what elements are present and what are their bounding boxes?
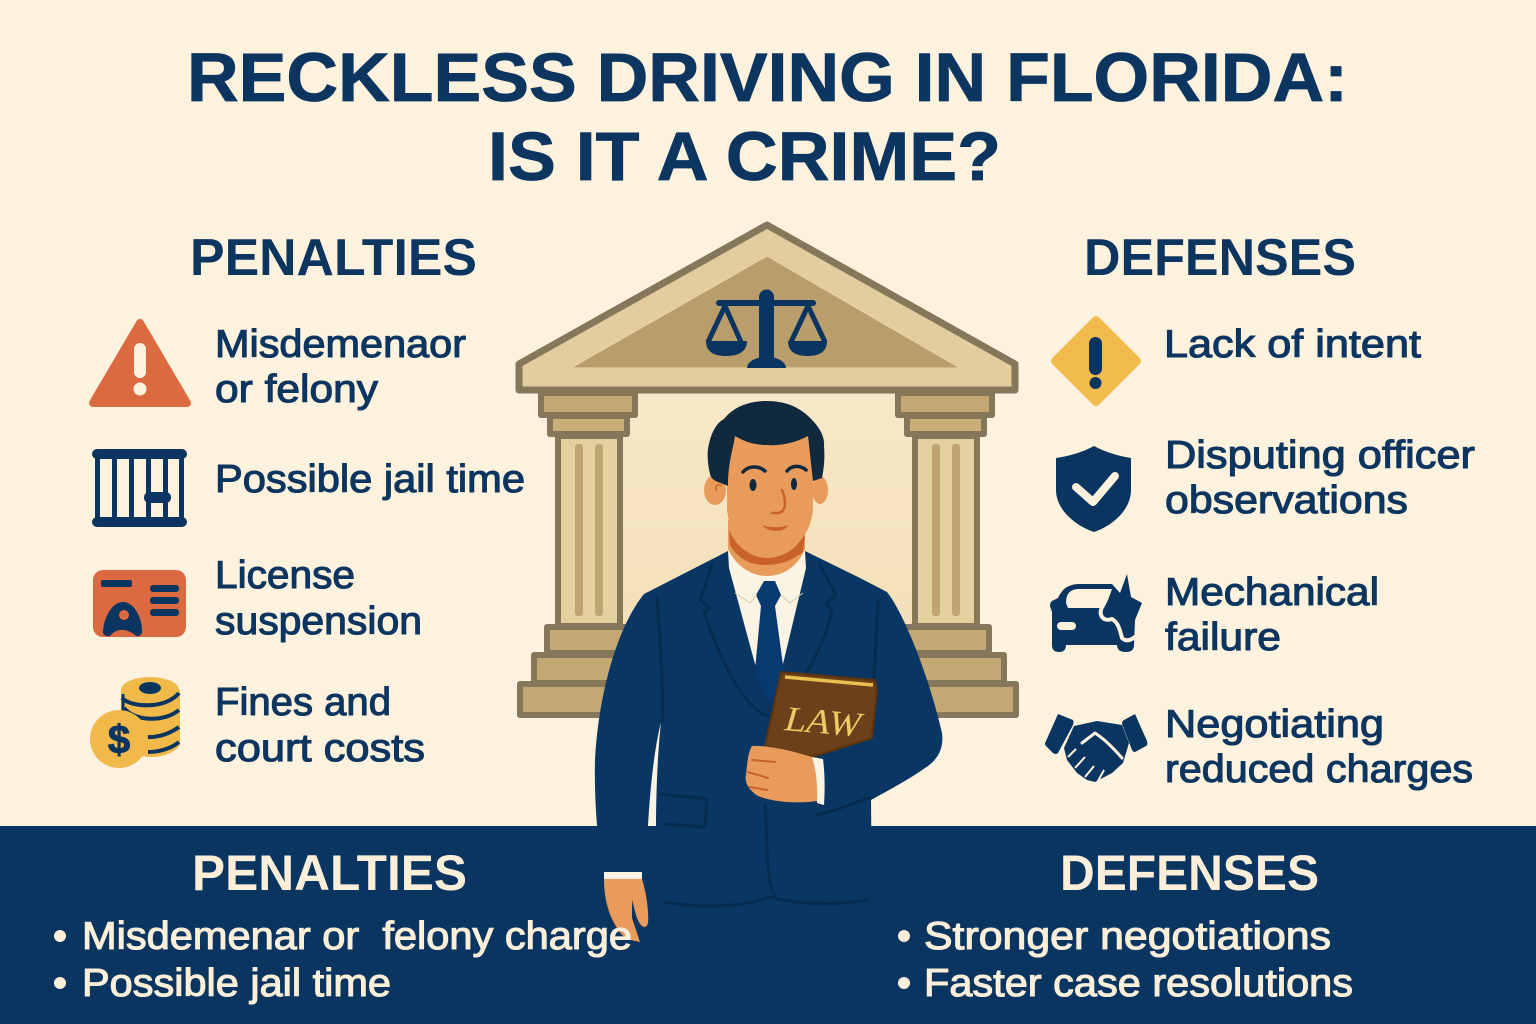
title: RECKLESS DRIVING IN FLORIDA: xyxy=(187,39,1348,116)
text: license suspension: License xyxy=(215,554,355,597)
text: misdemeanor or felony: or felony xyxy=(215,368,379,411)
icon: license card xyxy=(93,570,186,637)
collar creases xyxy=(735,593,803,603)
icon: warning triangle xyxy=(93,323,187,403)
back wall xyxy=(623,393,913,628)
text: misdemeanor or felony: Misdemenaor xyxy=(215,323,466,366)
suit jacket xyxy=(595,551,942,906)
icon: shield with check xyxy=(1056,446,1131,532)
title xyxy=(187,39,1348,195)
text: negotiating reduced charges: reduced charges xyxy=(1165,748,1473,791)
pocket xyxy=(658,794,707,827)
text: possible jail time: Possible jail time xyxy=(215,458,525,501)
courthouse xyxy=(519,225,1016,715)
hand holding book xyxy=(746,746,825,805)
chin shadow xyxy=(729,530,805,565)
neck xyxy=(728,520,805,590)
bottom panel: defenses xyxy=(898,845,1353,1005)
bottom panel: penalties xyxy=(54,845,632,1005)
icon: handshake xyxy=(1045,714,1147,782)
bullet list: Faster case resolutions xyxy=(924,962,1353,1005)
icon: caution diamond xyxy=(1055,320,1137,402)
icon: coins: $ xyxy=(108,718,130,762)
text: lack of intent: Lack of intent xyxy=(1164,323,1421,366)
icon: scales of justice xyxy=(706,290,827,368)
left column xyxy=(541,393,635,626)
panel: penalties list xyxy=(90,323,525,770)
bullet list: Possible jail time xyxy=(82,962,391,1005)
tie xyxy=(755,581,785,700)
trousers xyxy=(660,890,872,1024)
heading: PENALTIES xyxy=(192,845,467,901)
text: disputing officer observations xyxy=(1165,434,1475,522)
icon: jail bars xyxy=(92,449,187,527)
head xyxy=(704,401,828,565)
icon: car with damage xyxy=(1050,574,1142,652)
text: fines and court costs xyxy=(215,681,425,770)
text: mechanical failure: Mechanical xyxy=(1165,571,1379,614)
steps xyxy=(520,627,1016,715)
lawyer figure xyxy=(595,401,942,1024)
arm gap xyxy=(648,722,661,826)
law book: LAW xyxy=(782,699,866,745)
text: fines and court costs: Fines and xyxy=(215,681,391,724)
text: disputing officer observations: Disputing officer xyxy=(1165,434,1475,477)
pediment xyxy=(519,225,1015,390)
bullet list: Stronger negotiations xyxy=(924,915,1331,958)
bullet list xyxy=(54,915,632,1005)
text: misdemeanor or felony xyxy=(215,323,466,411)
heading: defenses: DEFENSES xyxy=(1084,229,1356,287)
text: negotiating reduced charges xyxy=(1165,703,1473,791)
shirt xyxy=(728,549,806,670)
text: fines and court costs: court costs xyxy=(215,727,425,770)
left hand and cuff xyxy=(604,872,648,942)
bullet list: Misdemenar or felony charge xyxy=(82,915,632,958)
bottom navy band xyxy=(0,826,1536,1024)
jacket lines xyxy=(657,565,878,906)
text: mechanical failure xyxy=(1165,571,1379,659)
title: IS IT A CRIME? xyxy=(488,118,1001,195)
heading: DEFENSES xyxy=(1060,845,1319,901)
panel: defenses list xyxy=(1045,320,1475,791)
text: negotiating reduced charges: Negotiating xyxy=(1165,703,1384,746)
right column xyxy=(898,393,992,626)
text: license suspension: suspension xyxy=(215,600,422,643)
bullet list xyxy=(898,915,1353,1005)
law book xyxy=(765,672,877,757)
text: license suspension xyxy=(215,554,422,643)
icon: coins xyxy=(90,677,180,768)
text: mechanical failure: failure xyxy=(1165,616,1281,659)
text: disputing officer observations: observations xyxy=(1165,479,1408,522)
heading: penalties: PENALTIES xyxy=(190,229,477,287)
